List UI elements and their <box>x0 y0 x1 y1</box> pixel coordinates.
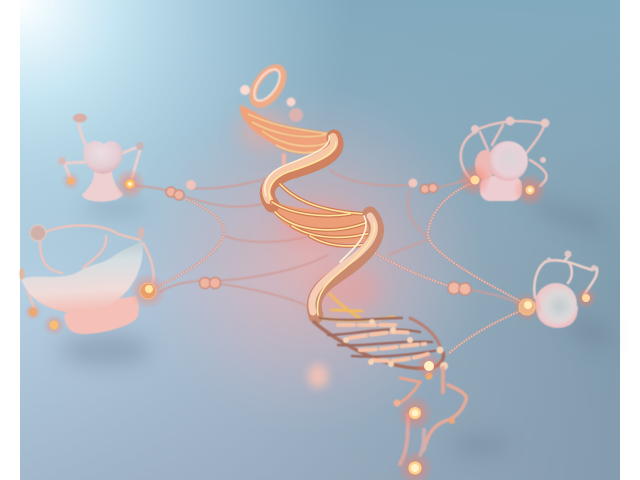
soft floor glow under helix <box>239 110 381 314</box>
object: top-right organ with sphere <box>461 116 550 201</box>
helix: lower rungs and strand <box>314 294 448 370</box>
object: top-left organ on pedestal <box>58 114 144 202</box>
helix: lower ribbon <box>312 214 376 316</box>
object: right sphere organ <box>534 250 597 328</box>
helix: middle rungs <box>272 184 375 246</box>
helix: lower tail <box>394 368 466 464</box>
cast shadows <box>60 195 617 455</box>
helix: upper ribbon <box>265 136 336 205</box>
connecting chains <box>137 170 522 354</box>
object: left dish organ <box>20 225 153 334</box>
glowing light nodes <box>24 163 597 480</box>
DNA helix <box>240 62 466 464</box>
helix: blurred top loop <box>240 62 336 166</box>
chain beads <box>155 184 522 354</box>
light reflection on floor <box>308 364 328 388</box>
knot connectors <box>166 178 471 295</box>
helix: middle filled body <box>268 196 380 243</box>
